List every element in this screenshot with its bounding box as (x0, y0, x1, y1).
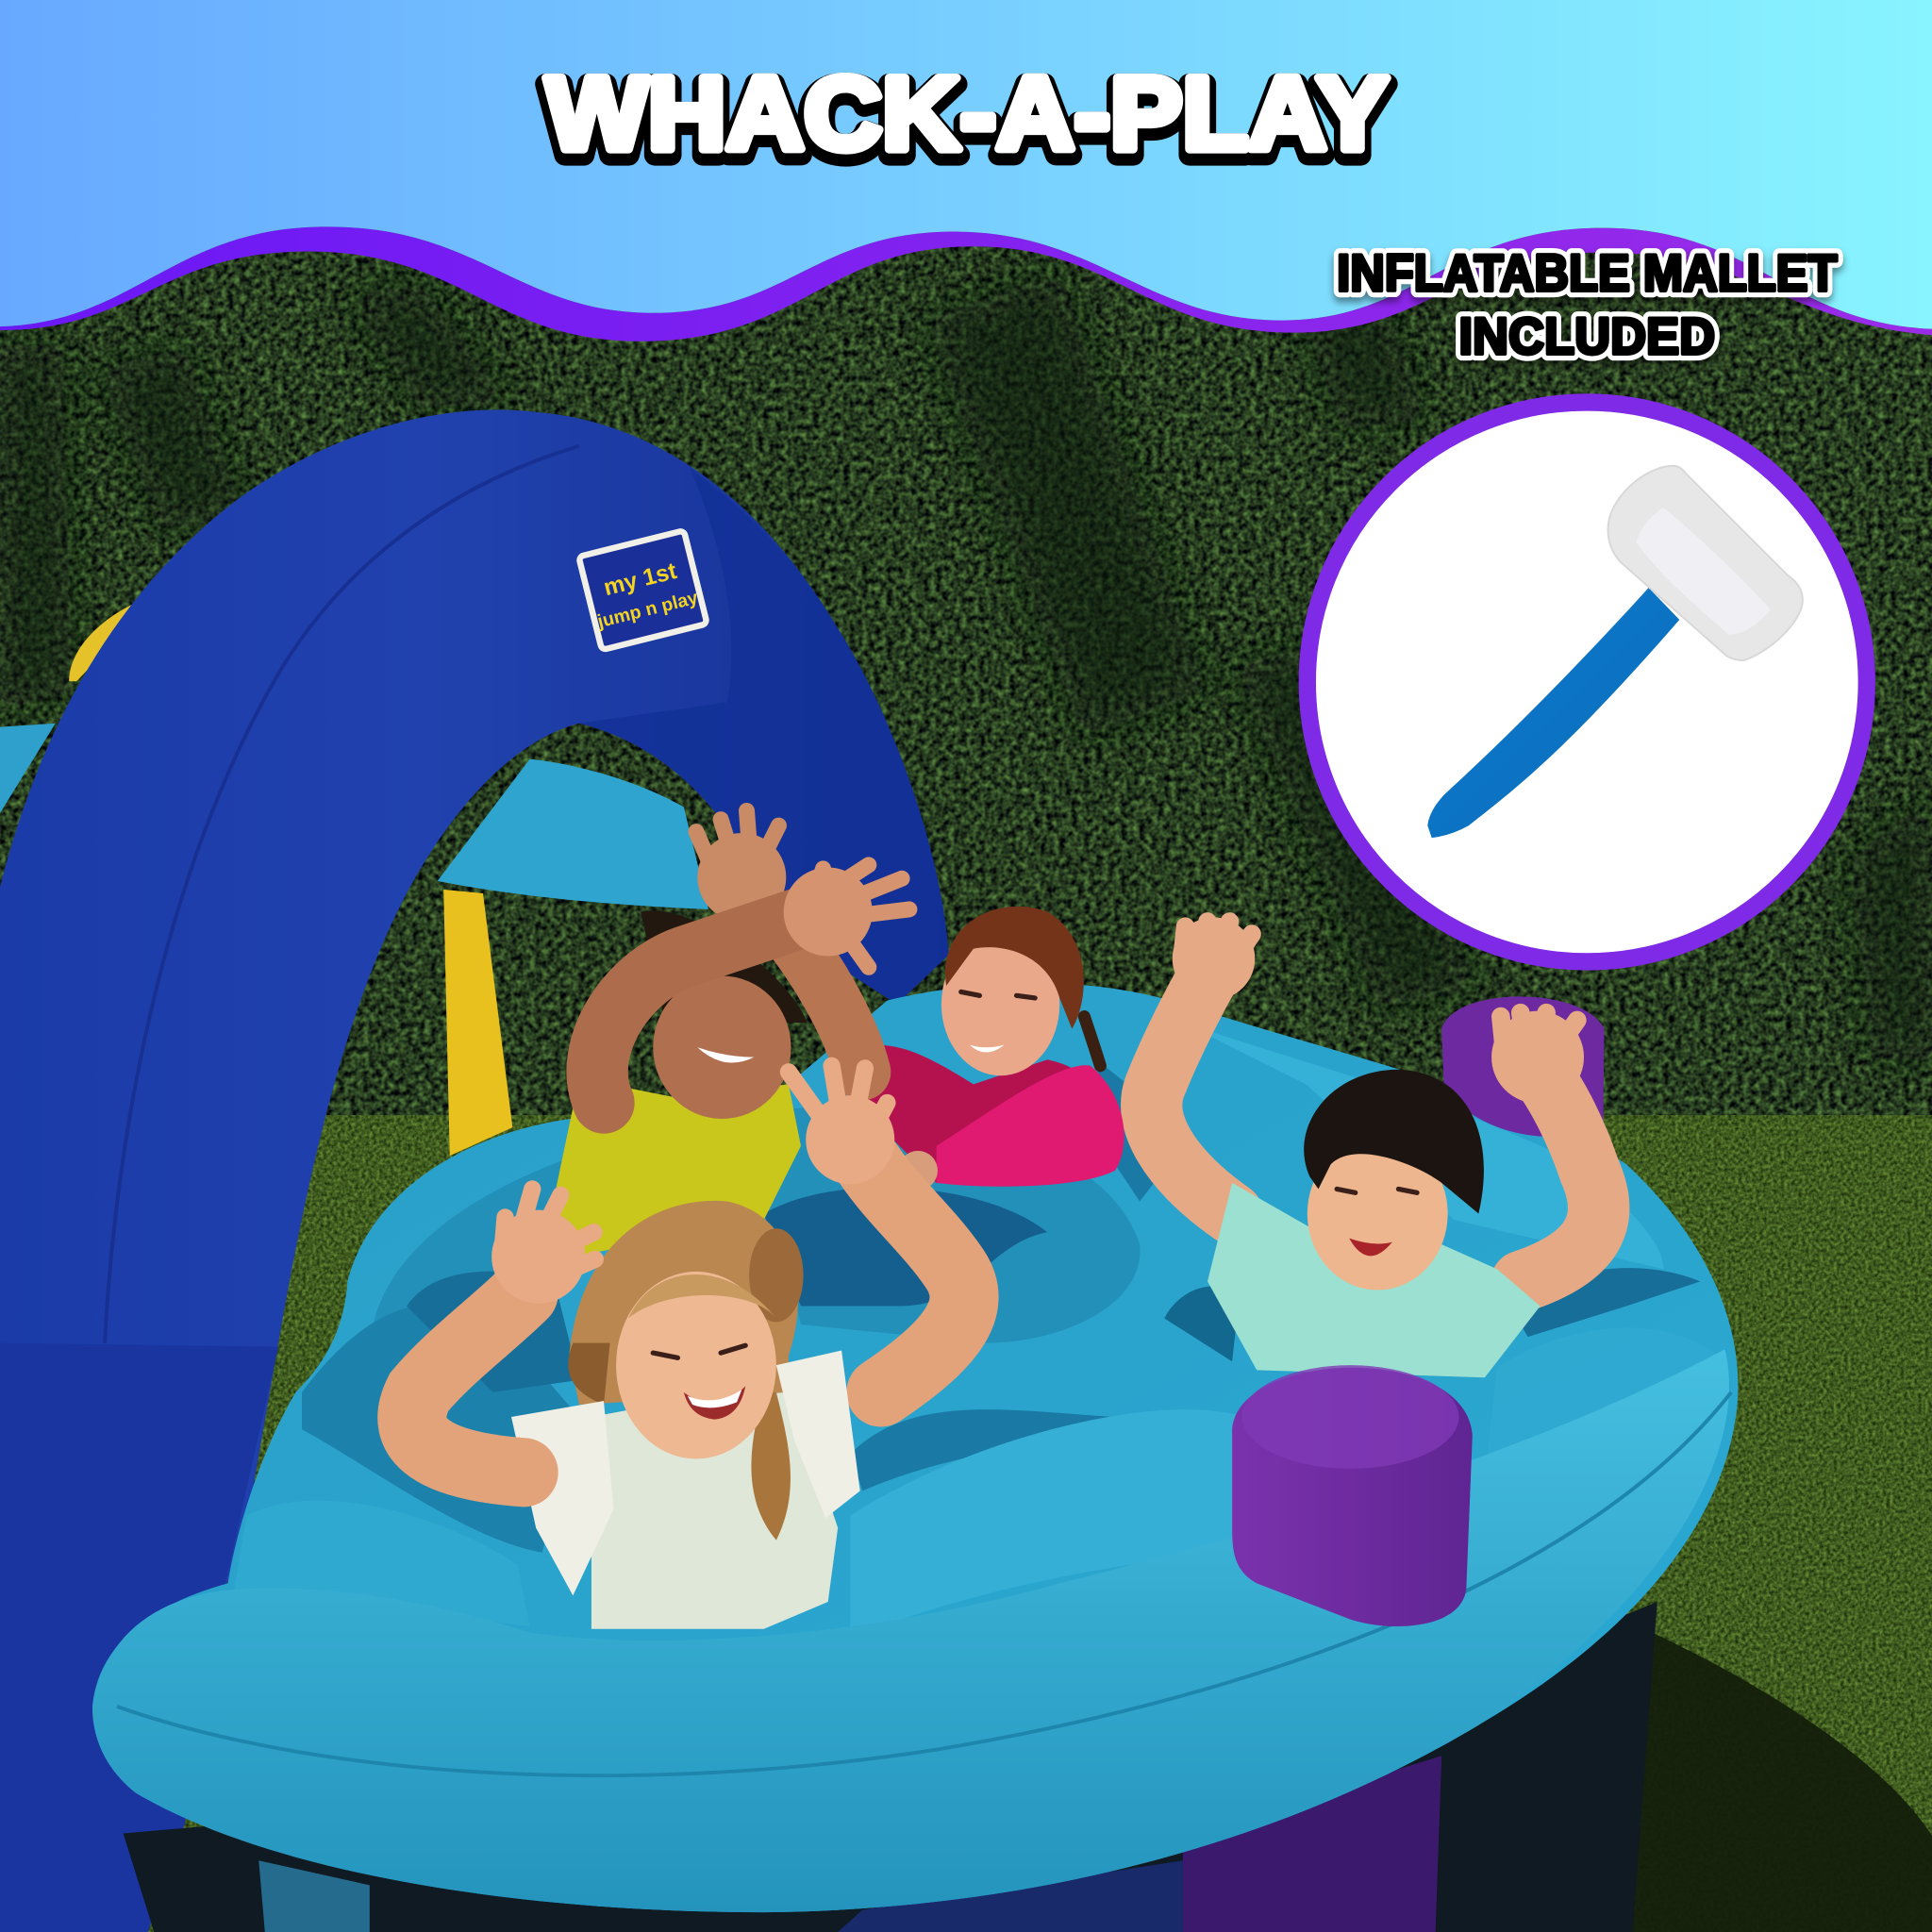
light blue rear tube (0, 724, 708, 909)
wave: purple edge (0, 226, 1932, 341)
girl in pink sweater (838, 907, 1124, 1191)
blue arch (0, 409, 949, 1932)
inner rings and shadows (370, 1108, 1140, 1368)
hair (569, 1201, 798, 1405)
rear purple post (1441, 996, 1605, 1137)
logo badge: my 1st (601, 558, 679, 601)
left arm (412, 1293, 524, 1473)
girl in lace top (412, 1066, 964, 1629)
background: hedge wall (0, 222, 1932, 1158)
top (591, 1380, 838, 1629)
net base (124, 1602, 1657, 1932)
shirt (1208, 1183, 1541, 1377)
mallet caption: INFLATABLE MALLET (1337, 243, 1837, 302)
lace sleeves (511, 1401, 613, 1595)
mallet callout circle (1307, 402, 1867, 961)
mallet caption: INCLUDED (1458, 307, 1715, 365)
title: WHACK-A-PLAY (546, 57, 1389, 172)
icon: inflatable mallet (1427, 466, 1803, 838)
mallet caption: INFLATABLE MALLET (1337, 243, 1837, 302)
logo badge: jump n play (594, 588, 700, 633)
mallet caption (1337, 243, 1837, 365)
face (616, 1272, 776, 1458)
logo badge (578, 530, 708, 650)
right hand (806, 1095, 894, 1184)
head and hair (1307, 1138, 1448, 1291)
mallet caption: INCLUDED (1458, 307, 1715, 365)
front bolster roll (92, 1349, 1729, 1912)
header band (0, 0, 1932, 341)
boy in mint shirt (1152, 922, 1599, 1377)
hands (1182, 922, 1577, 1094)
yellow straps (69, 601, 512, 1156)
girl in yellow shirt (552, 810, 909, 1257)
front purple post (1232, 1365, 1473, 1626)
title: WHACK-A-PLAY (546, 63, 1389, 178)
background: lawn (0, 1115, 1932, 1932)
inflatable turquoise pad (92, 983, 1738, 1912)
sky gradient fill (0, 0, 1932, 329)
